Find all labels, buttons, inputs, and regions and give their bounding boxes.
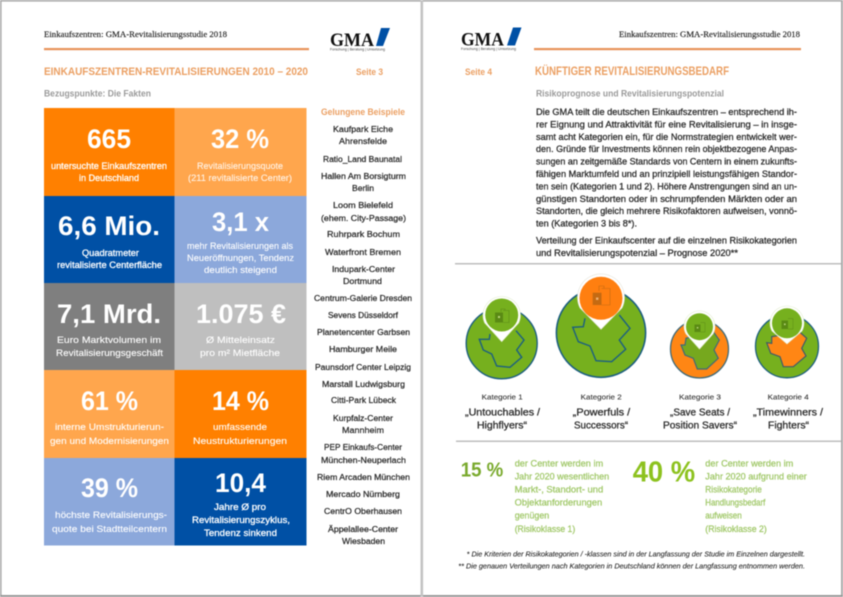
tile: 14 %: umfassende [213, 422, 267, 433]
list: successful examples: Berlin [352, 183, 374, 193]
tile: 3,1 x [174, 196, 306, 283]
tile: 665 centers [44, 108, 174, 196]
label: category 3: Kategorie 3 [679, 392, 721, 401]
tile: 6,6 Mio.: 6,6 Mio. [58, 211, 160, 241]
list: successful examples: Äppelallee-Center [328, 524, 398, 534]
page number 4: Seite 4 [465, 67, 492, 77]
tile: 3,1 x: deutlich steigend [204, 265, 277, 276]
tile: 39 % [44, 458, 174, 546]
list: successful examples: Ahrensfelde [339, 136, 387, 146]
label: category 3 [663, 392, 737, 432]
list: successful examples [314, 107, 412, 546]
stat: 40 percent [633, 457, 807, 534]
list: successful examples: Wiesbaden [342, 536, 385, 546]
icon: category 3 map pin [670, 311, 728, 378]
panel: left page [44, 28, 412, 546]
stat: 15 percent: 15 % [461, 460, 503, 482]
list: successful examples: CentrO Oberhausen [324, 506, 402, 516]
stat: 40 percent: aufweisen [705, 511, 742, 521]
stat: 40 percent: Jahr 2020 aufgrund einer [705, 472, 807, 482]
tile: 1.075 €: 1.075 € [196, 299, 286, 329]
tile: 10,4: Tendenz sinkend [204, 528, 277, 539]
text block: intro paragraph: günstigen Standorten oder in schrumpfenden Märkten oder an [536, 194, 797, 205]
tile: 3,1 x: 3,1 x [212, 207, 269, 237]
list: successful examples: Riem Arcaden München [317, 472, 410, 482]
tile: 10,4: Revitalisierungszyklus, [192, 515, 290, 526]
tile: 6,6 Mio. [44, 196, 174, 283]
text block: intro paragraph: fähigen Marktumfeld und an prinzipiell leistungsfähigen Standor- [536, 169, 797, 180]
text block: intro paragraph: sungen an zeitgemäße Standards von Centern in einem zukunfts- [536, 157, 797, 168]
tile: 665 centers: in Deutschland [79, 173, 139, 184]
tile: 10,4: Jahre Ø pro [214, 502, 266, 513]
logo: GMA left: Forschung | Beratung | Umsetzung [330, 48, 385, 52]
list: successful examples: Waterfront Bremen [325, 247, 401, 257]
logo: GMA left: GMA [330, 30, 374, 51]
tile: 665 centers: 665 [87, 124, 131, 154]
logo: GMA right [461, 28, 522, 51]
tile: 6,6 Mio.: Quadratmeter [82, 248, 139, 259]
stat: 40 percent: Risikokategorie [705, 485, 762, 495]
tile: 7,1 Mrd.: Euro Marktvolumen im [57, 335, 161, 346]
icon: category 1 map pin [466, 297, 537, 379]
text block: intro paragraph: Die GMA teilt die deutschen Einkaufszentren – entsprechend ih- [536, 107, 797, 118]
footnotes: ** Die genauen Verteilungen nach Kategorien in Deutschland können der Langfassung entnommen werden. [458, 563, 805, 570]
footnotes: * Die Kriterien der Risikokategorien / -klassen sind in der Langfassung der Studie im Einzelnen dargestellt. [467, 552, 805, 559]
tile: 14 % [174, 370, 306, 458]
tile: 14 %: 14 % [212, 386, 269, 416]
label: category 4 [753, 392, 823, 432]
logo: GMA right: GMA [461, 30, 504, 50]
tile: 3,1 x: Neueröffnungen, Tendenz [187, 253, 294, 264]
label: category 1: Kategorie 1 [482, 392, 523, 401]
tile: 39 %: quote bei Stadtteilcentern [52, 524, 167, 535]
stat: 40 percent: (Risikoklasse 2) [705, 524, 767, 534]
list: successful examples: Hamburger Meile [329, 344, 397, 354]
list: successful examples: Sevens Düsseldorf [328, 310, 399, 320]
label: category 1: „Untouchables / [465, 408, 540, 419]
list: successful examples: Indupark-Center [332, 264, 395, 274]
text block: intro paragraph: ten (Kategorien 3 bis 8*). [536, 219, 637, 230]
list: successful examples: Kaufpark Eiche [333, 124, 393, 134]
logo: GMA left [330, 28, 390, 52]
list heading: Gelungene Beispiele [321, 107, 405, 117]
subheading: risk forecast: Risikoprognose und Revitalisierungspotenzial [536, 88, 724, 100]
label: category 4: Fighters“ [768, 421, 809, 432]
tile: 32 % quota: Revitalisierungsquote [197, 161, 283, 172]
list: successful examples: Mannheim [342, 425, 384, 435]
tile: 7,1 Mrd. [44, 283, 174, 370]
list: successful examples: Mercado Nürnberg [326, 489, 400, 499]
label: category 4: Kategorie 4 [768, 392, 809, 401]
stat: 15 percent: Markt-, Standort- und [515, 485, 603, 495]
list: successful examples: München-Neuperlach [321, 455, 406, 465]
tile: 61 %: interne Umstrukturierun- [55, 422, 164, 433]
tile: 665 centers: untersuchte Einkaufszentren [51, 161, 167, 172]
tile: 32 % quota: (211 revitalisierte Center) [188, 173, 292, 184]
tile: 1.075 €: Ø Mitteleinsatz [206, 335, 275, 346]
label: category 2: Kategorie 2 [581, 392, 622, 401]
text block: intro paragraph: den. Gründe für Investments können rein objektbezogene Anpas- [536, 144, 797, 155]
list: successful examples: (ehem. City-Passage) [321, 213, 406, 223]
stat: 40 percent: 40 % [633, 457, 695, 489]
label: category 1: Highflyers“ [477, 421, 527, 432]
list: successful examples: Loom Bielefeld [333, 200, 393, 210]
tile: 1.075 € [174, 283, 306, 370]
label: category 2 [573, 392, 630, 432]
list: successful examples: Marstall Ludwigsburg [322, 379, 405, 389]
tile: 7,1 Mrd.: Revitalisierungsgeschäft [56, 348, 163, 359]
tile: 3,1 x: mehr Revitalisierungen als [187, 241, 293, 252]
list: successful examples: Ratio_Land Baunatal [323, 154, 402, 164]
text block: distribution caption: Verteilung der Einkaufscenter auf die einzelnen Risikokategorien [536, 236, 797, 246]
tile: 39 %: 39 % [81, 473, 138, 503]
list: successful examples: Kurpfalz-Center [333, 413, 393, 423]
tile: 10,4: 10,4 [215, 468, 266, 498]
tile: 61 %: 61 % [81, 386, 138, 416]
tile: 6,6 Mio.: revitalisierte Centerfläche [57, 260, 162, 271]
list: successful examples: Centrum-Galerie Dresden [314, 293, 412, 303]
text block: intro paragraph [536, 107, 797, 230]
footnotes [458, 552, 805, 570]
list: successful examples: Citti-Park Lübeck [331, 395, 397, 405]
tile: 14 %: Neustrukturierungen [193, 436, 287, 447]
stat: 15 percent [461, 459, 609, 534]
panel: right page [455, 28, 841, 570]
tile: 10,4 [174, 458, 306, 546]
stat: 15 percent: Jahr 2020 wesentlichen [515, 472, 609, 482]
text block: distribution caption [536, 236, 797, 259]
tile: 61 %: gen und Modernisierungen [50, 436, 169, 447]
tile: 61 % [44, 370, 174, 458]
text block: intro paragraph: ten sein (Kategorien 1 und 2). Höhere Anstrengungen sind an un- [536, 181, 797, 192]
list: successful examples: Hallen Am Borsigturm [321, 171, 406, 181]
tile: 39 %: höchste Revitalisierungs- [55, 510, 167, 521]
stat: 15 percent: der Center werden im [515, 459, 604, 469]
stat: 40 percent: Handlungsbedarf [705, 498, 766, 508]
list: successful examples: Dortmund [343, 276, 382, 286]
tile: 7,1 Mrd.: 7,1 Mrd. [57, 299, 161, 329]
label: category 2: „Powerfuls / [573, 408, 630, 419]
stat: 15 percent: Objektanforderungen [515, 498, 602, 508]
label: category 2: Successors“ [574, 421, 628, 432]
page number 3: Seite 3 [356, 67, 383, 77]
label: category 1 [465, 392, 540, 432]
list: successful examples: Planetencenter Garbsen [317, 327, 410, 337]
heading: future need: KÜNFTIGER REVITALISIERUNGSBEDARF [535, 65, 729, 78]
list: successful examples: PEP Einkaufs-Center [324, 442, 402, 452]
tile: 32 % quota: 32 % [211, 124, 269, 154]
text block: distribution caption: und Revitalisierungspotenzial – Prognose 2020** [536, 248, 738, 259]
running header left: Einkaufszentren: GMA-Revitalisierungsstudie 2018 [44, 29, 227, 39]
list: successful examples: Paunsdorf Center Leipzig [315, 362, 411, 372]
text block: intro paragraph: rer Eignung und Attraktivität für eine Revitalisierung – in insge- [536, 119, 797, 130]
text block: intro paragraph: Standorten, die gleich mehrere Risikofaktoren aufweisen, vonnö- [536, 206, 797, 217]
running header right: Einkaufszentren: GMA-Revitalisierungsstudie 2018 [619, 29, 800, 39]
subheading: facts: Bezugspunkte: Die Fakten [44, 88, 151, 100]
icon: category 4 map pin [756, 306, 818, 378]
tile: 32 % quota [174, 108, 306, 196]
stat: 15 percent: (Risikoklasse 1) [515, 524, 575, 534]
label: category 4: „Timewinners / [753, 408, 823, 419]
list: successful examples: Ruhrpark Bochum [327, 229, 400, 239]
label: category 3: „Save Seats / [670, 408, 730, 419]
logo: GMA right: Forschung | Beratung | Umsetzung [461, 47, 516, 51]
icon: category 2 map pin [556, 274, 646, 377]
heading: page title: EINKAUFSZENTREN-REVITALISIERUNGEN 2010 – 2020 [44, 66, 308, 78]
label: category 3: Position Savers“ [663, 421, 737, 432]
text block: intro paragraph: samt acht Kategorien ein, für die Normstrategien entwickelt wer- [536, 132, 797, 143]
stat: 40 percent: der Center werden im [705, 459, 794, 469]
stat: 15 percent: genügen [515, 511, 549, 521]
tile: 1.075 €: pro m² Mietfläche [200, 348, 280, 359]
